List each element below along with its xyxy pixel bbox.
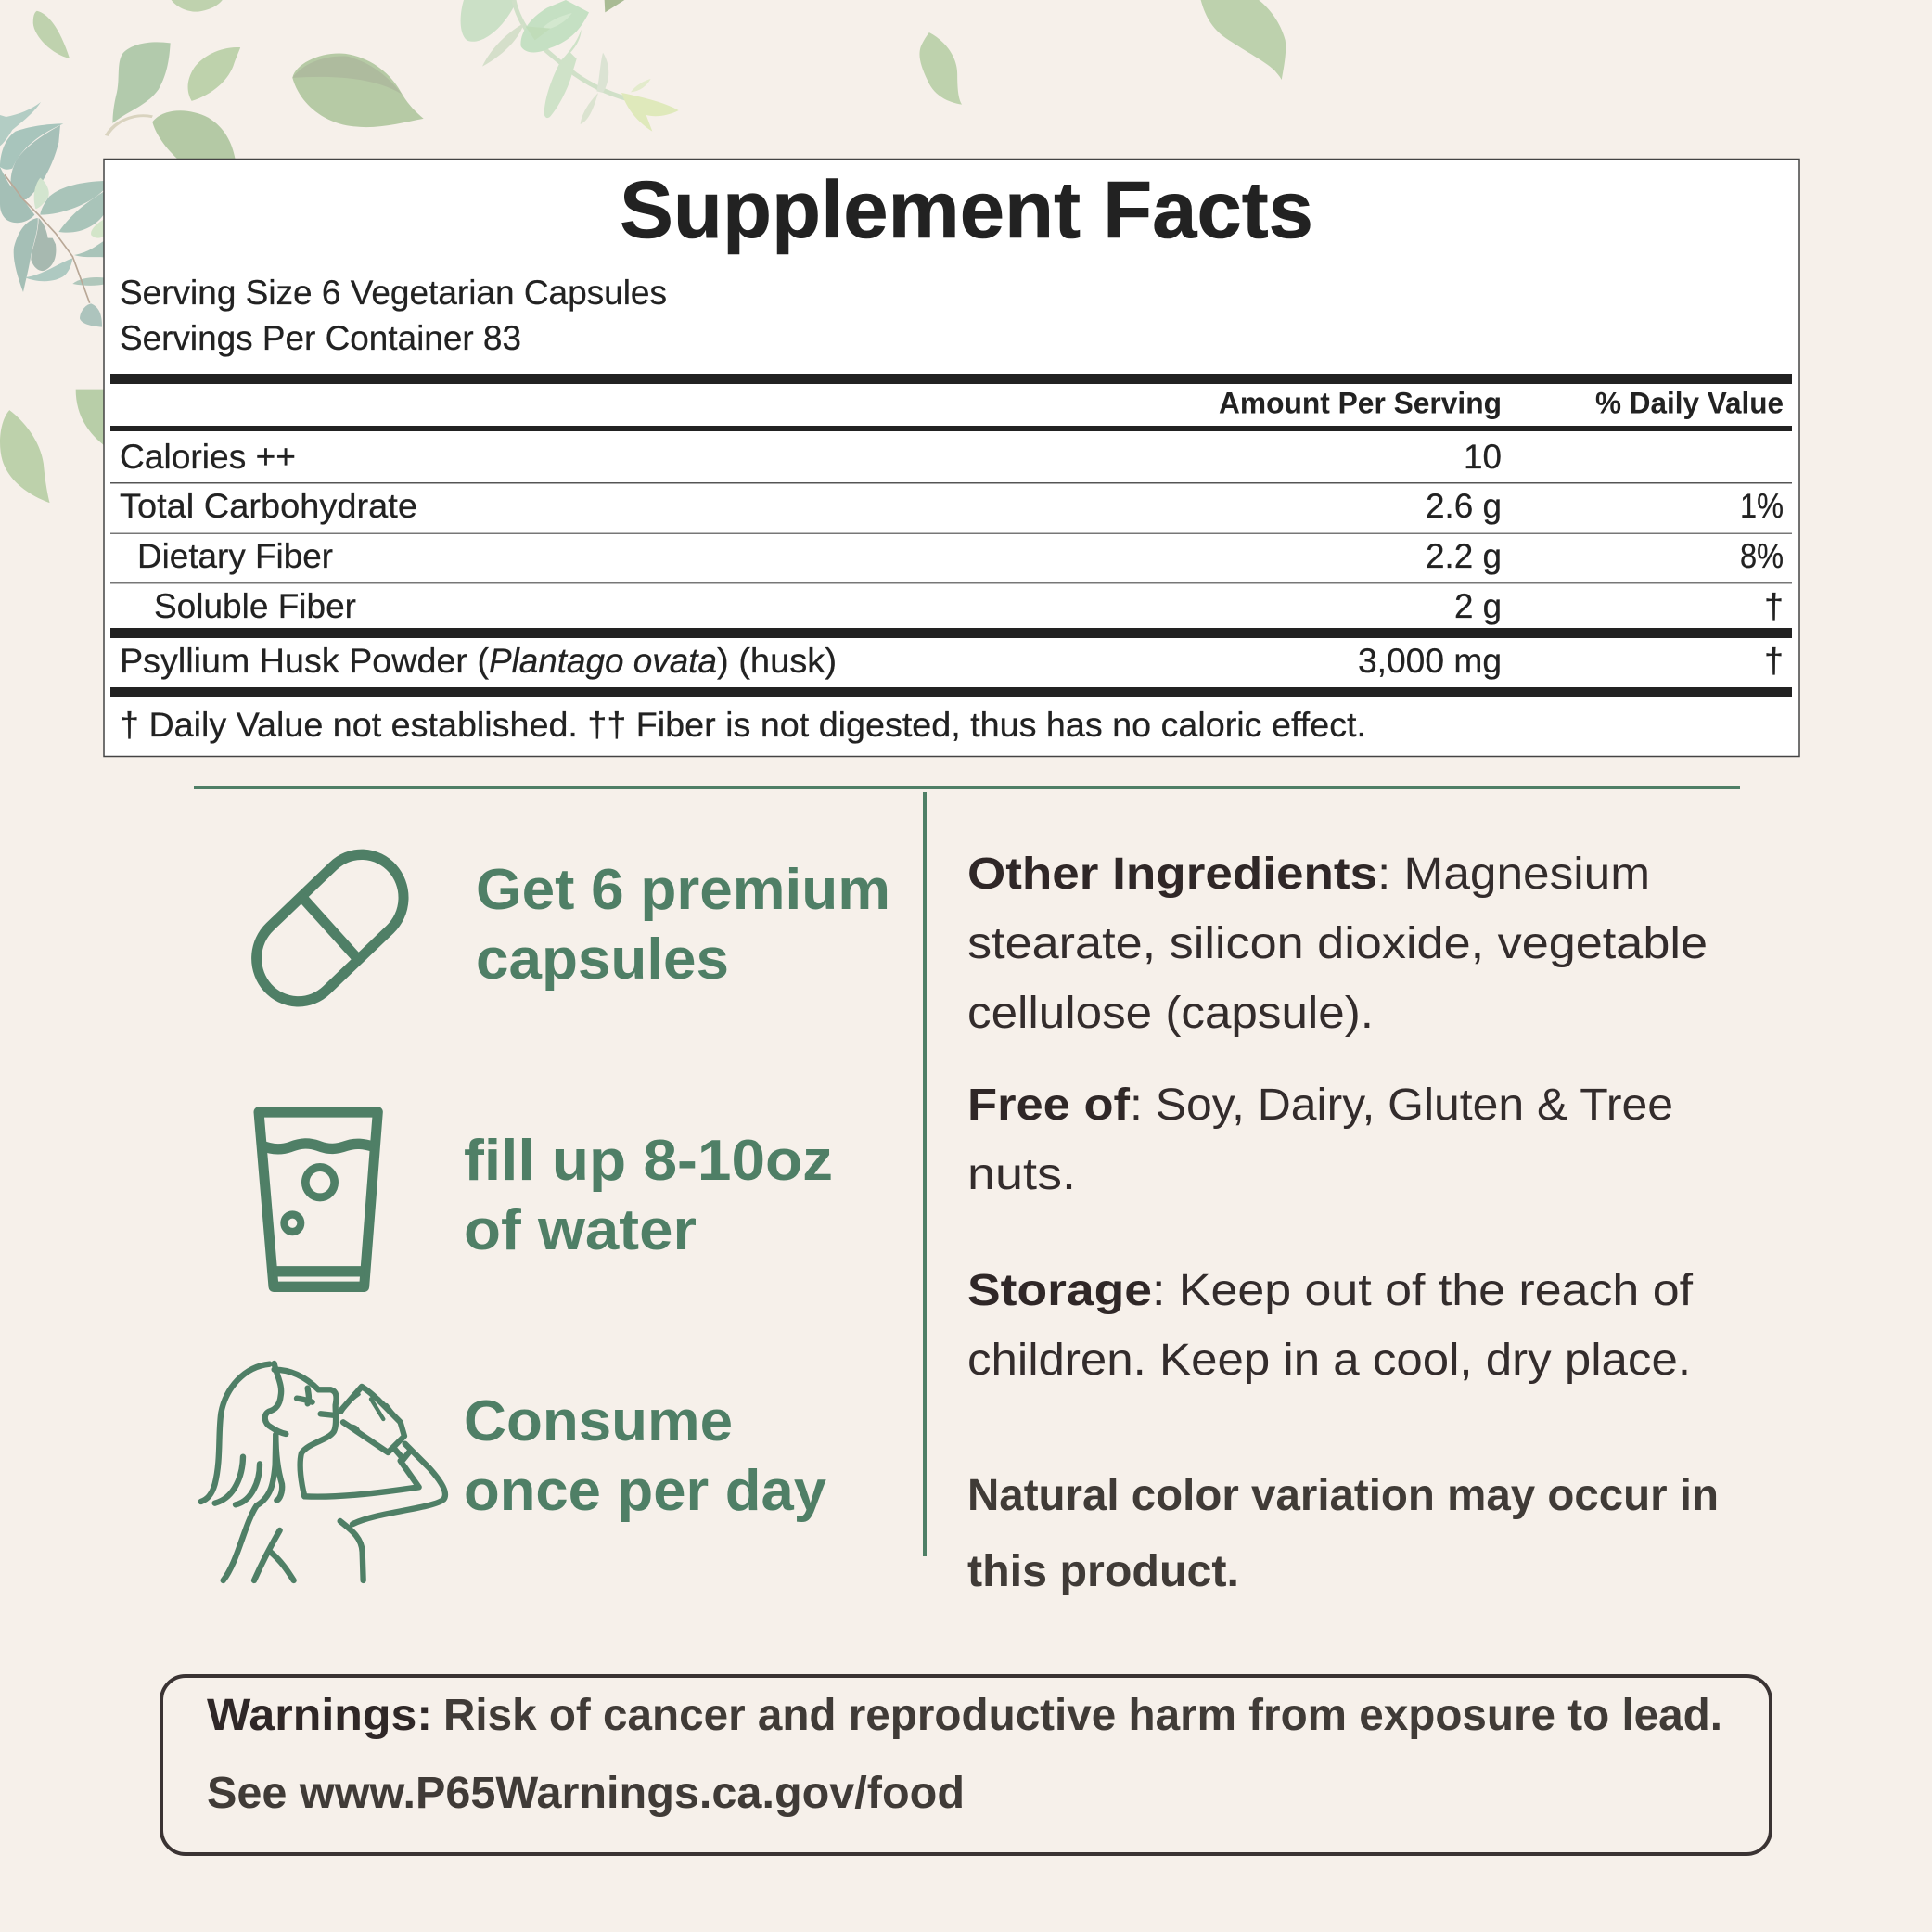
text: other ingredients: cellulose (capsule).	[967, 989, 1374, 1038]
footnote: † Daily Value not established. †† Fiber is not digested, thus has no caloric effect.	[120, 706, 1366, 744]
decorative leaves: top right	[919, 0, 1286, 105]
text: other ingredients	[967, 850, 1708, 1038]
row: total carbohydrate: 2.6 g	[1426, 487, 1502, 525]
text: storage: children. Keep in a cool, dry place.	[967, 1336, 1691, 1385]
heading: supplement facts: Supplement Facts	[620, 165, 1313, 255]
text: other ingredients: Other Ingredients	[967, 850, 1377, 899]
decorative leaves: left teal branch	[0, 102, 104, 327]
text: storage: Storage	[967, 1266, 1152, 1315]
row: psyllium husk powder: Psyllium Husk Powder (	[120, 642, 490, 680]
text: consume once per day: once per day	[464, 1459, 827, 1523]
panel: supplement facts table	[104, 160, 1799, 757]
row: total carbohydrate: 1%	[1740, 487, 1784, 525]
row: dietary fiber	[137, 537, 1784, 575]
table header: Amount Per Serving	[1219, 386, 1502, 419]
text: free of: nuts.	[967, 1150, 1076, 1199]
row: calories: 10	[1464, 438, 1502, 476]
text: fill up water: of water	[464, 1198, 697, 1262]
text: serving info: Servings Per Container 83	[120, 319, 521, 357]
icon: glass of water	[259, 1112, 377, 1286]
text: serving info: Serving Size 6 Vegetarian Capsules	[120, 274, 667, 312]
row: soluble fiber: Soluble Fiber	[154, 587, 356, 625]
icon: capsule	[257, 854, 403, 1002]
row: dietary fiber: 8%	[1740, 537, 1784, 575]
decorative leaves: top left	[0, 0, 424, 503]
text: storage: : Keep out of the reach of	[1152, 1266, 1694, 1315]
callout: warnings	[161, 1676, 1771, 1854]
text: other ingredients: stearate, silicon dioxide, vegetable	[967, 919, 1708, 968]
row: psyllium husk powder: †	[1764, 642, 1784, 680]
row: soluble fiber: †	[1764, 587, 1784, 625]
text: fill up water: fill up 8-10oz	[464, 1129, 833, 1193]
row: total carbohydrate: Total Carbohydrate	[120, 487, 417, 525]
text: get 6 premium capsules	[476, 858, 890, 992]
row: psyllium husk powder: Plantago ovata	[489, 642, 717, 680]
row: calories: Calories ++	[120, 438, 296, 476]
text: consume once per day: Consume	[464, 1389, 733, 1453]
row: psyllium husk powder: ) (husk)	[717, 642, 837, 680]
callout: warnings: See www.P65Warnings.ca.gov/food	[207, 1769, 965, 1818]
text: free of: : Soy, Dairy, Gluten & Tree	[1130, 1081, 1673, 1130]
text: consume once per day	[464, 1389, 827, 1523]
text: serving info	[120, 274, 667, 357]
row: dietary fiber: Dietary Fiber	[137, 537, 333, 575]
decorative leaves: top centre sprig	[461, 0, 679, 132]
row: soluble fiber	[154, 587, 1784, 625]
text: natural color variation: this product.	[967, 1547, 1239, 1596]
table header: % Daily Value	[1595, 386, 1784, 419]
row: total carbohydrate	[120, 487, 1784, 525]
row: psyllium husk powder	[120, 642, 1784, 680]
text: get 6 premium capsules: Get 6 premium	[476, 858, 890, 922]
text: other ingredients: : Magnesium	[1377, 850, 1650, 899]
text: free of: Free of	[967, 1081, 1131, 1130]
callout: warnings: Warnings:	[207, 1691, 432, 1740]
callout: warnings: Risk of cancer and reproductive harm from exposure to lead.	[443, 1691, 1722, 1740]
table header	[1219, 386, 1784, 419]
text: free of	[967, 1081, 1673, 1199]
text: natural color variation: Natural color variation may occur in	[967, 1471, 1719, 1520]
text: fill up water	[464, 1129, 833, 1262]
text: storage	[967, 1266, 1694, 1385]
text: get 6 premium capsules: capsules	[476, 928, 729, 992]
icon: woman drinking	[201, 1363, 445, 1580]
row: calories	[120, 438, 1502, 476]
row: psyllium husk powder: 3,000 mg	[1358, 642, 1502, 680]
row: soluble fiber: 2 g	[1454, 587, 1502, 625]
text: natural color variation	[967, 1471, 1719, 1596]
row: dietary fiber: 2.2 g	[1426, 537, 1502, 575]
